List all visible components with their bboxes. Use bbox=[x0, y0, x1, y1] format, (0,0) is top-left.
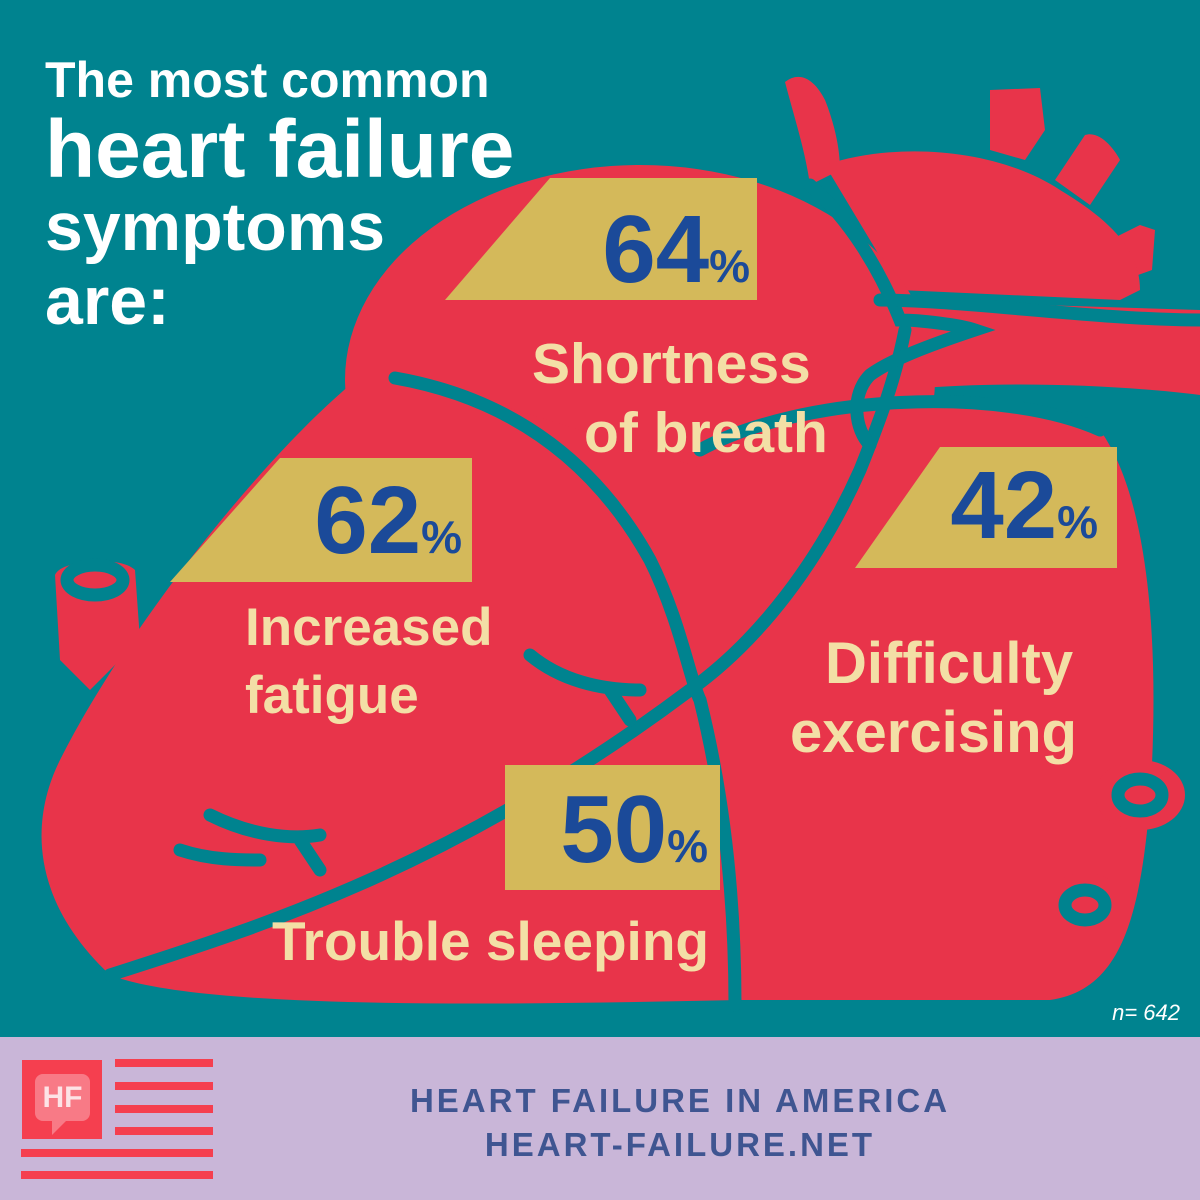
upper lobe bbox=[345, 165, 935, 595]
left ventricle bbox=[42, 380, 740, 1004]
gold box: 64% bbox=[445, 178, 757, 300]
vessel: top stubs bbox=[990, 88, 1045, 160]
left vessel bbox=[55, 561, 140, 690]
footer bbox=[0, 1037, 1200, 1200]
gold box: 62% bbox=[170, 458, 472, 582]
aorta band bbox=[854, 300, 1200, 440]
stat: 42%: 42% bbox=[950, 452, 1098, 559]
title: symptoms bbox=[45, 189, 385, 265]
gold box: 50% bbox=[505, 765, 720, 890]
title: heart failure bbox=[45, 104, 514, 195]
footer text bbox=[410, 1082, 950, 1163]
upper right atrium bbox=[825, 151, 1140, 300]
stat: 62%: 62% bbox=[314, 467, 462, 574]
logo: HF flag bbox=[21, 1059, 213, 1179]
logo: HF flag: HF bbox=[42, 1081, 82, 1114]
label: increased fatigue: fatigue bbox=[245, 666, 419, 725]
label: increased fatigue: Increased bbox=[245, 598, 492, 657]
label: difficulty exercising: Difficulty bbox=[825, 631, 1073, 696]
vessel: top arch bbox=[785, 77, 840, 185]
label: shortness of breath: Shortness bbox=[532, 332, 811, 396]
label: trouble sleeping: Trouble sleeping bbox=[272, 910, 709, 972]
heart body bbox=[42, 77, 1200, 1004]
stat: 64%: 64% bbox=[602, 196, 750, 303]
right ventricle bbox=[700, 402, 1153, 1000]
gold box: 42% bbox=[855, 447, 1117, 568]
right vessels bbox=[1095, 760, 1185, 830]
teal divider lines bbox=[67, 185, 1200, 1005]
sample size: n= 642 bbox=[1112, 1000, 1180, 1025]
footer text: HEART FAILURE IN AMERICA bbox=[410, 1082, 950, 1119]
title: The most common bbox=[45, 52, 489, 108]
label: shortness of breath: of breath bbox=[584, 401, 828, 465]
stat: 50%: 50% bbox=[560, 776, 708, 883]
label: difficulty exercising: exercising bbox=[790, 700, 1077, 765]
title: are: bbox=[45, 263, 170, 339]
footer text: HEART-FAILURE.NET bbox=[485, 1126, 875, 1163]
